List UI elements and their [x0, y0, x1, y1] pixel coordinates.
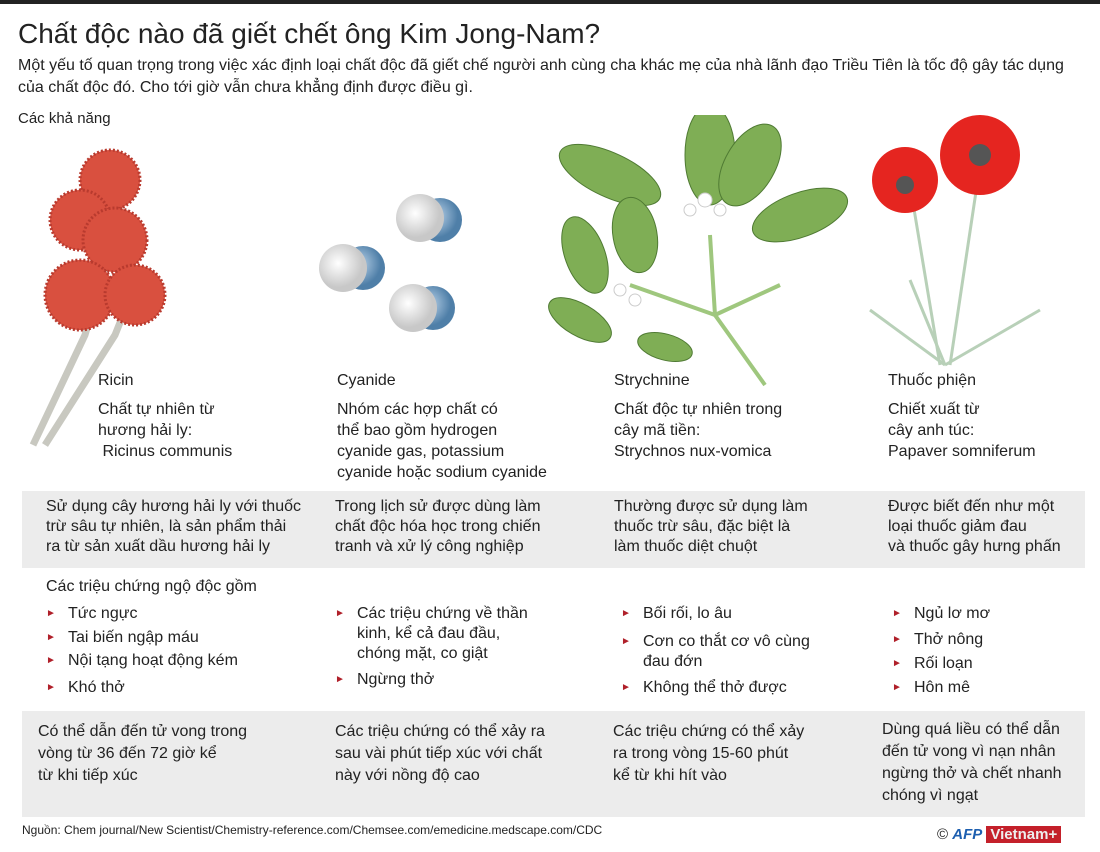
text: ►	[892, 658, 902, 669]
panel: timing band: này với nồng độ cao	[335, 767, 480, 784]
panel: usage band: thuốc trừ sâu, đặc biệt là	[614, 518, 790, 535]
panel: timing band: sau vài phút tiếp xúc với chất	[335, 745, 542, 762]
panel: timing band: Dùng quá liều có thể dẫn	[882, 721, 1060, 738]
text: ►	[892, 682, 902, 693]
panel: timing band: đến tử vong vì nạn nhân	[882, 743, 1056, 760]
symptoms: opium: Thở nông	[914, 631, 983, 648]
intro text: Một yếu tố quan trọng trong việc xác định loại chất độc đã giết chế người anh cùng cha khác mẹ của nhà lãnh đạo Triều Tiên là tốc độ gây tác dụng của chất độc đó. Cho tới giờ vẫn chưa khẳng định được điều gì.	[18, 57, 1064, 96]
panel: cyanide label: Nhóm các hợp chất có	[337, 401, 498, 418]
symptoms: opium	[892, 605, 990, 696]
symptoms: opium: Rối loạn	[914, 655, 973, 672]
symptoms: cyanide	[335, 605, 528, 688]
panel: strychnine label: Strychnos nux-vomica	[614, 443, 771, 460]
panel: usage band: loại thuốc giảm đau	[888, 518, 1027, 535]
icon: ricin	[30, 148, 166, 447]
panel: timing band: ngừng thở và chết nhanh	[882, 765, 1062, 782]
panel: ricin label: Ricinus communis	[102, 443, 232, 460]
text: ►	[335, 674, 345, 685]
title: Chất độc nào đã giết chết ông Kim Jong-Nam?	[18, 18, 600, 49]
symptoms: ricin: Khó thở	[68, 679, 125, 696]
panel: strychnine label: Chất độc tự nhiên trong	[614, 401, 782, 418]
text: ►	[892, 608, 902, 619]
symptoms: strychnine: đau đớn	[643, 653, 702, 670]
symptoms: ricin: Nội tạng hoạt động kém	[68, 652, 238, 669]
panel: ricin label: Ricin	[98, 372, 134, 389]
symptoms: strychnine	[621, 605, 810, 696]
panel: timing band: Có thể dẫn đến tử vong trong	[38, 723, 247, 740]
panel: usage band: Sử dụng cây hương hải ly với thuốc	[46, 498, 301, 515]
panel: timing band: vòng từ 36 đến 72 giờ kể	[38, 745, 217, 762]
logo: © AFP Vietnam+	[937, 826, 1057, 843]
panel: usage band	[22, 491, 1085, 568]
icon: strychnine	[548, 115, 848, 386]
subheading: Các khả năng	[18, 110, 111, 127]
symptoms: ricin: Tai biến ngập máu	[68, 629, 199, 646]
panel: timing band: Các triệu chứng có thể xảy ra	[335, 723, 545, 740]
icon: cyanide	[319, 194, 462, 332]
source: Nguồn: Chem journal/New Scientist/Chemistry-reference.com/Chemsee.com/emedicine.medscape.com/CDC	[22, 823, 602, 837]
panel: cyanide label: Cyanide	[337, 372, 396, 389]
panel: usage band: trừ sâu tự nhiên, là sản phẩm thải	[46, 518, 286, 535]
text: ►	[621, 636, 631, 647]
panel: usage band: tranh và xử lý công nghiệp	[335, 538, 524, 555]
panel: timing band: từ khi tiếp xúc	[38, 767, 138, 784]
panel: ricin label: Chất tự nhiên từ	[98, 401, 215, 418]
panel: timing band: kể từ khi hít vào	[613, 767, 727, 784]
top bar	[0, 0, 1100, 4]
panel: cyanide label: cyanide gas, potassium	[337, 443, 504, 460]
symptoms: ricin	[46, 605, 238, 696]
panel: usage band: Được biết đến như một	[888, 498, 1054, 515]
text: ►	[335, 608, 345, 619]
symptoms: opium: Ngủ lơ mơ	[914, 605, 990, 622]
panel: usage band: và thuốc gây hưng phấn	[888, 538, 1061, 555]
panel: usage band: Trong lịch sử được dùng làm	[335, 498, 541, 515]
panel: strychnine label: Strychnine	[614, 372, 690, 389]
icon: poppy	[869, 115, 1041, 366]
symptoms: cyanide: kinh, kể cả đau đầu,	[357, 625, 500, 642]
symptoms: cyanide: Các triệu chứng về thần	[357, 605, 528, 622]
panel: timing band	[22, 711, 1085, 817]
panel: cyanide label: thể bao gồm hydrogen	[337, 422, 497, 439]
panel: ricin label: hương hải ly:	[98, 422, 192, 439]
panel: usage band: chất độc hóa học trong chiến	[335, 518, 540, 535]
panel: timing band: chóng vì ngạt	[882, 787, 978, 804]
panel: opium label: Thuốc phiện	[888, 372, 976, 389]
symptoms: ricin: Tức ngực	[68, 605, 137, 622]
text: ►	[46, 608, 56, 619]
panel: strychnine label: cây mã tiền:	[614, 422, 700, 439]
text: ►	[46, 682, 56, 693]
text: ►	[621, 608, 631, 619]
panel: cyanide label	[337, 372, 547, 481]
panel: opium label: Papaver somniferum	[888, 443, 1036, 460]
panel: strychnine label	[614, 372, 782, 460]
panel: opium label	[888, 372, 1036, 460]
panel: timing band: ra trong vòng 15-60 phút	[613, 745, 788, 762]
text: ►	[46, 655, 56, 666]
panel: usage band: Thường được sử dụng làm	[614, 498, 808, 515]
text: ►	[621, 682, 631, 693]
symptoms: opium: Hôn mê	[914, 679, 970, 696]
symptoms: strychnine: Bối rối, lo âu	[643, 605, 732, 622]
panel: ricin label	[98, 372, 232, 460]
panel: usage band: ra từ sản xuất dầu hương hải ly	[46, 538, 270, 555]
panel: opium label: Chiết xuất từ	[888, 401, 980, 418]
symptoms: strychnine: Cơn co thắt cơ vô cùng	[643, 633, 810, 650]
text: ►	[892, 634, 902, 645]
symptoms: strychnine: Không thể thở được	[643, 679, 787, 696]
panel: opium label: cây anh túc:	[888, 422, 974, 439]
panel: timing band: Các triệu chứng có thể xảy	[613, 723, 804, 740]
panel: usage band: làm thuốc diệt chuột	[614, 538, 757, 555]
symptoms: cyanide: chóng mặt, co giật	[357, 645, 488, 662]
symptoms heading: Các triệu chứng ngộ độc gồm	[46, 578, 257, 595]
panel: cyanide label: cyanide hoặc sodium cyanide	[337, 464, 547, 481]
text: ►	[46, 632, 56, 643]
symptoms: cyanide: Ngừng thở	[357, 671, 434, 688]
